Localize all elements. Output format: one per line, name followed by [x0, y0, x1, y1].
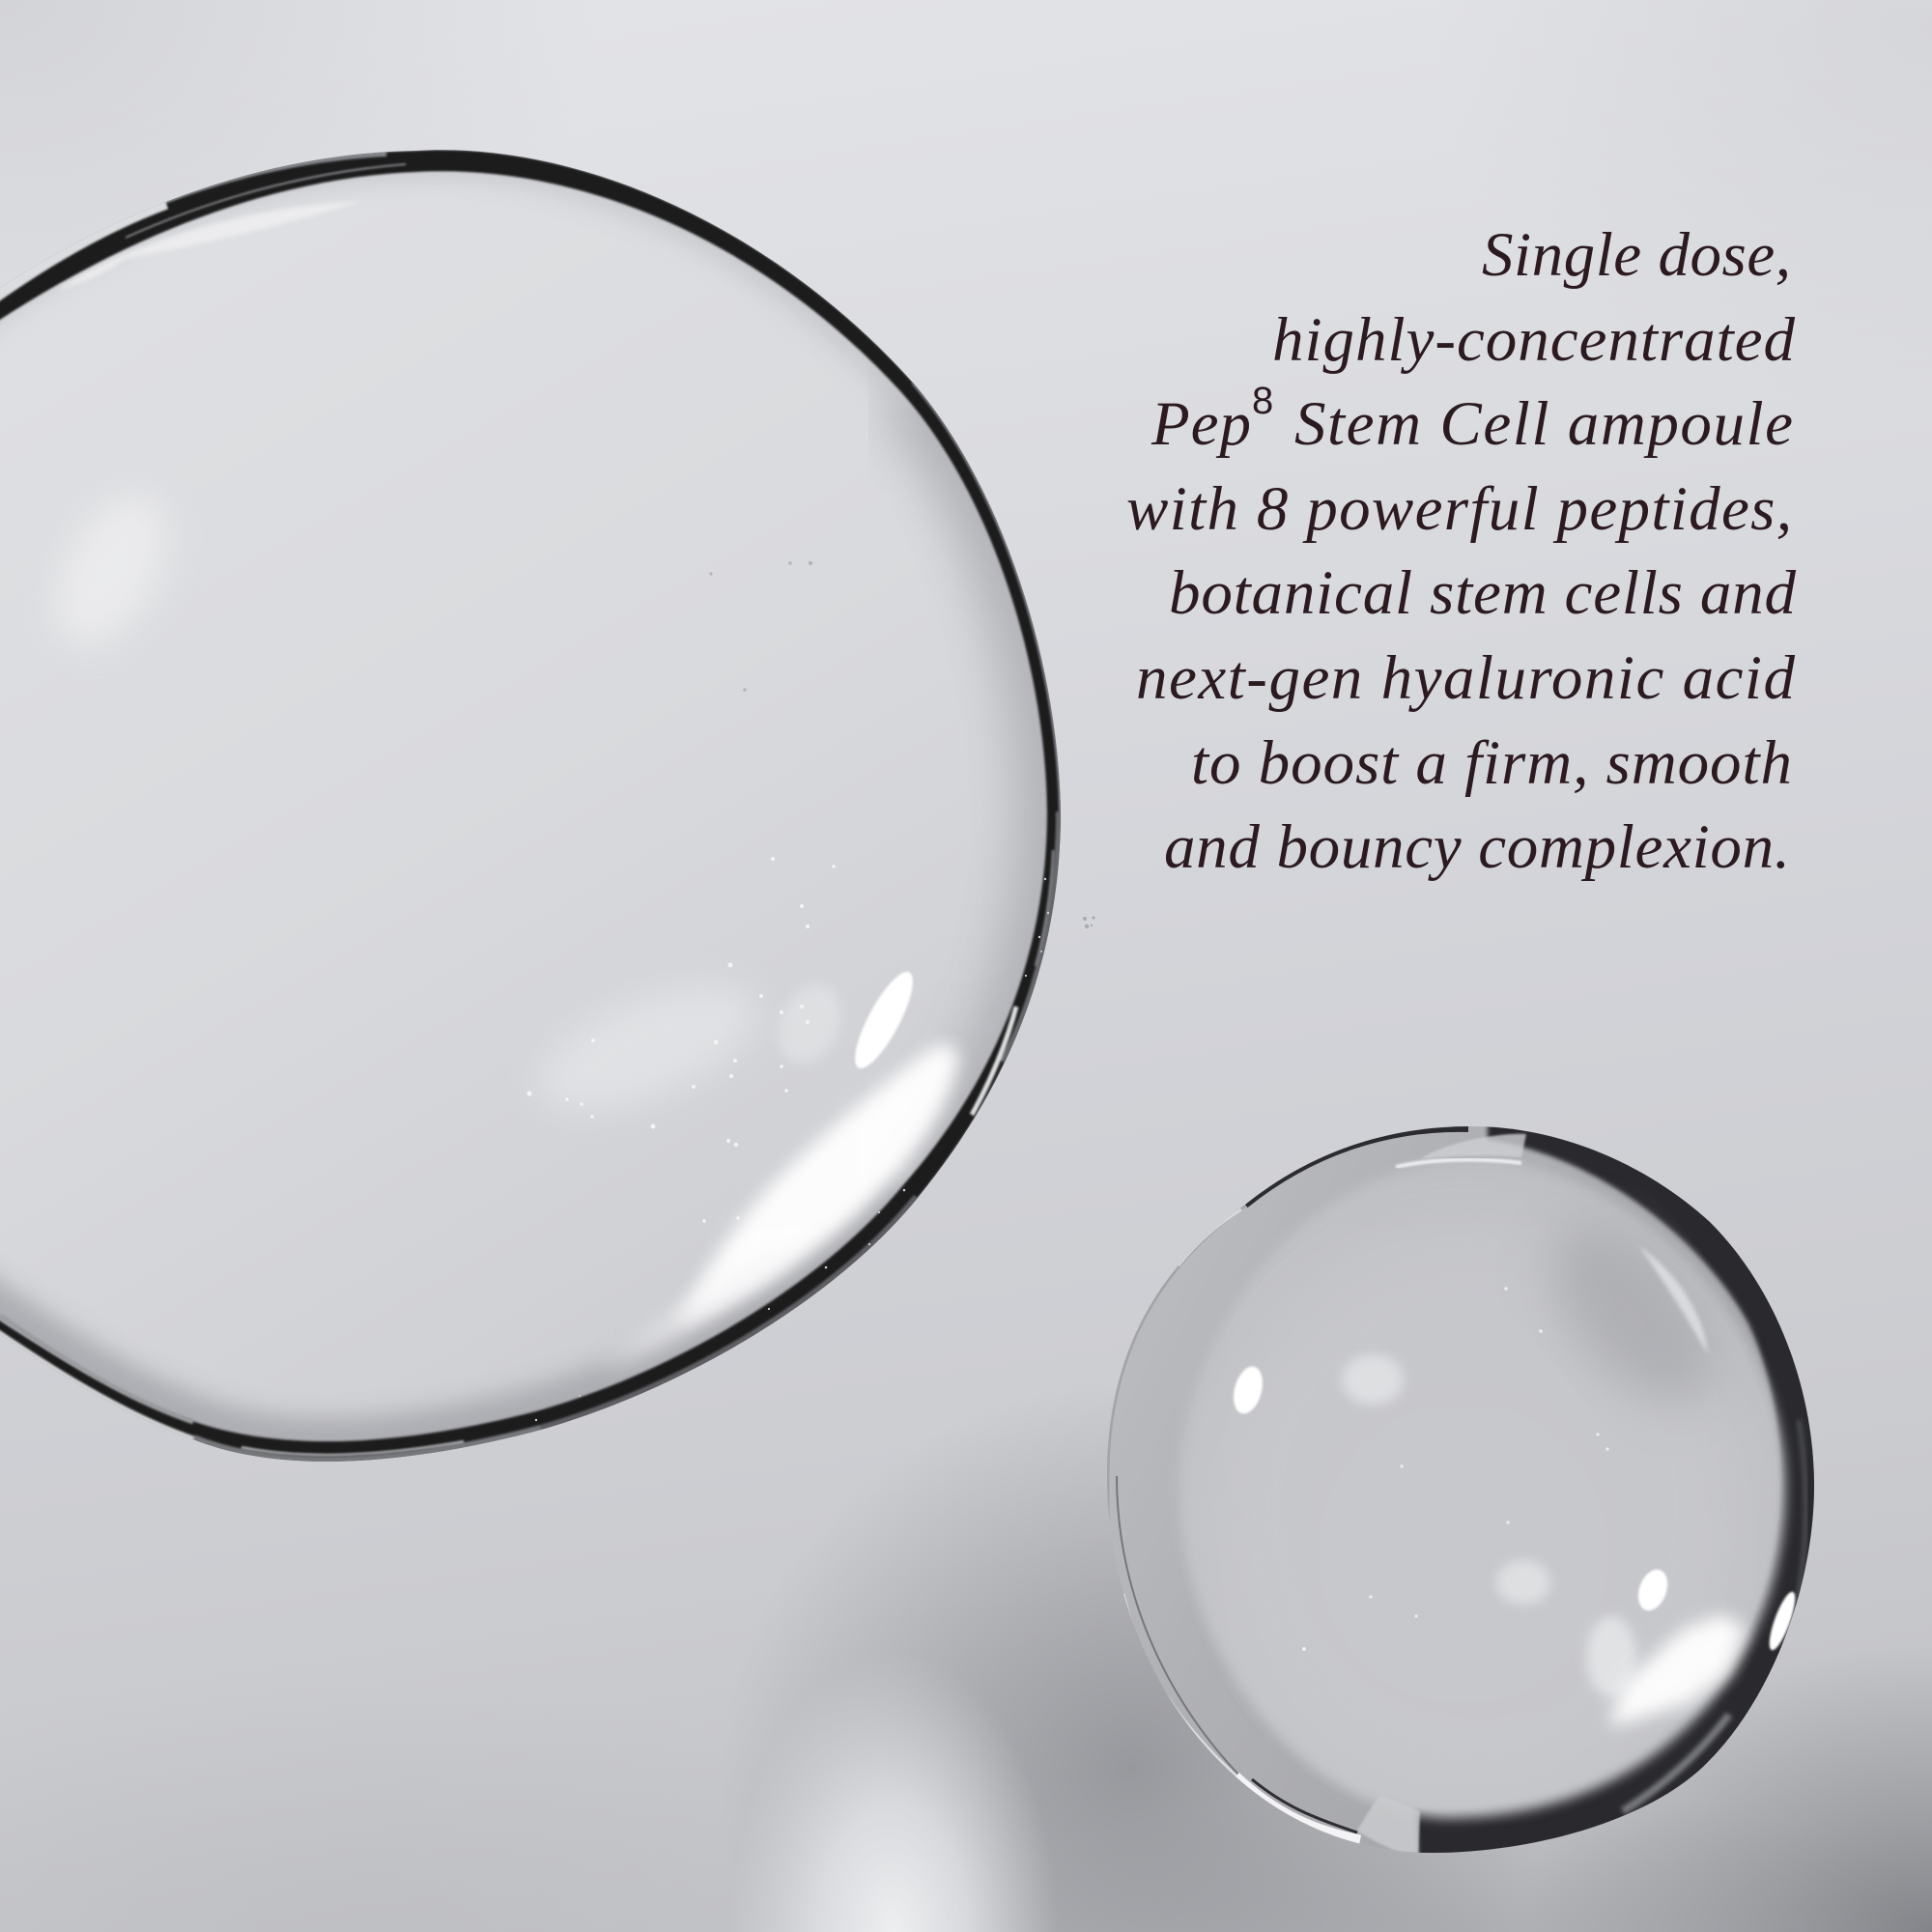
- line 6: next-gen hyaluronic acid: [1136, 643, 1795, 713]
- line 3: Pep8 Stem Cell ampoule: 8: [1252, 380, 1273, 422]
- droplet rim: [0, 150, 1061, 1462]
- large liquid droplet: [0, 150, 1095, 1462]
- specular highlight crescent: [854, 971, 914, 1069]
- line 2: highly-concentrated: [1272, 305, 1795, 375]
- rim speckles: [535, 878, 1049, 1421]
- suspended micro bubbles: [526, 561, 836, 1223]
- line 3: Pep8 Stem Cell ampoule: Pep: [1151, 389, 1251, 459]
- dome left edge lines: [1107, 1205, 1245, 1584]
- dome outer body: [1107, 1126, 1814, 1853]
- line 4: with 8 powerful peptides,: [1126, 474, 1792, 544]
- text block: product description: [1126, 220, 1797, 882]
- line 8: and bouncy complexion.: [1164, 812, 1790, 882]
- dome suspended specks: [1302, 1287, 1609, 1651]
- rim edge lights: [0, 151, 1061, 1462]
- small domed droplet: [1107, 1111, 1835, 1879]
- line 3: Pep8 Stem Cell ampoule: [1151, 380, 1793, 459]
- line 5: botanical stem cells and: [1169, 558, 1797, 628]
- dome dark crescent rim: [1416, 1126, 1814, 1853]
- dome lens interior: [1179, 1157, 1785, 1818]
- line 3: Pep8 Stem Cell ampoule: Stem Cell ampoule: [1294, 389, 1793, 459]
- dome specular spots: [1229, 1363, 1267, 1417]
- dome glass wedges: [1420, 1134, 1526, 1159]
- dome highlights: [1639, 1246, 1708, 1354]
- line 7: to boost a firm, smooth: [1191, 728, 1792, 798]
- droplet inner shading and highlights: [0, 150, 1061, 1462]
- stray micro droplet: [1083, 916, 1095, 928]
- droplet body: [0, 150, 1061, 1462]
- line 1: Single dose,: [1482, 220, 1791, 290]
- lower rim grey glass streaks: [1623, 1715, 1729, 1811]
